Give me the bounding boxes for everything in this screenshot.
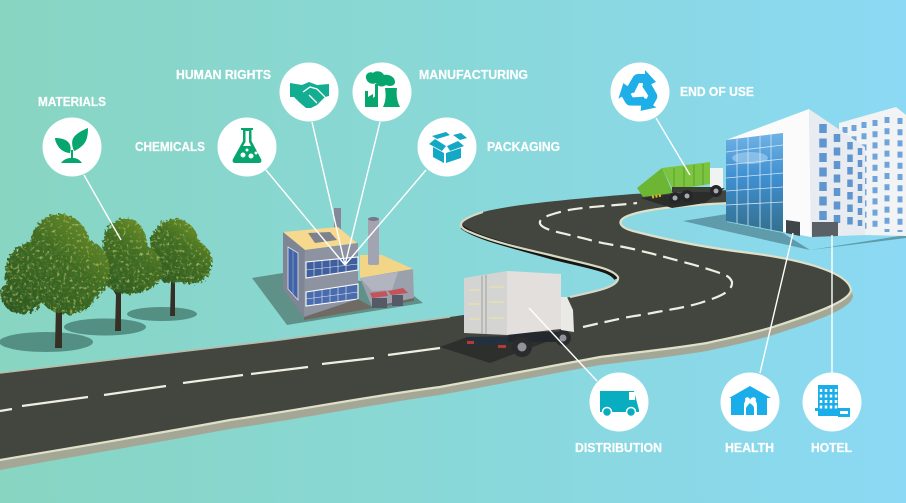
connector lines bbox=[84, 118, 832, 381]
icon: distribution bbox=[590, 372, 648, 432]
tree 3 bbox=[151, 219, 212, 316]
main side wall bbox=[809, 109, 865, 237]
icon: end of use bbox=[610, 62, 670, 122]
icon: materials bbox=[42, 118, 102, 176]
label: distribution: DISTRIBUTION bbox=[575, 441, 662, 455]
tree 2 bbox=[98, 218, 162, 331]
label: packaging: PACKAGING bbox=[487, 140, 560, 154]
buildings bbox=[683, 107, 906, 250]
label: materials: MATERIALS bbox=[38, 95, 106, 109]
main front white bbox=[726, 109, 811, 237]
icon: packaging bbox=[418, 118, 476, 176]
large chimney bbox=[368, 218, 379, 265]
tree 1 bbox=[1, 214, 109, 348]
label: chemicals: CHEMICALS bbox=[135, 140, 205, 154]
left wall bbox=[283, 232, 305, 317]
icon: health bbox=[720, 372, 780, 432]
icon: human rights bbox=[280, 62, 338, 122]
label: health: HEALTH bbox=[725, 441, 774, 455]
back building bbox=[839, 107, 906, 236]
front wall bbox=[304, 243, 358, 317]
label: hotel: HOTEL bbox=[811, 441, 852, 455]
main roof bbox=[283, 227, 357, 250]
canopies bbox=[370, 291, 388, 298]
glass facade bbox=[726, 133, 783, 232]
garbage truck bbox=[637, 162, 725, 208]
label: human rights: HUMAN RIGHTS bbox=[176, 68, 271, 82]
annex bbox=[360, 255, 413, 278]
factory bbox=[252, 208, 423, 325]
icon: chemicals bbox=[218, 118, 276, 176]
trees bbox=[0, 214, 212, 352]
centre line dashes bbox=[0, 203, 732, 411]
delivery truck bbox=[440, 271, 574, 363]
icon: manufacturing bbox=[352, 62, 412, 122]
small chimney bbox=[334, 208, 341, 239]
label: manufacturing: MANUFACTURING bbox=[419, 68, 528, 82]
road bbox=[0, 190, 853, 470]
label: end of use: END OF USE bbox=[680, 85, 754, 99]
icon: hotel bbox=[802, 372, 862, 432]
